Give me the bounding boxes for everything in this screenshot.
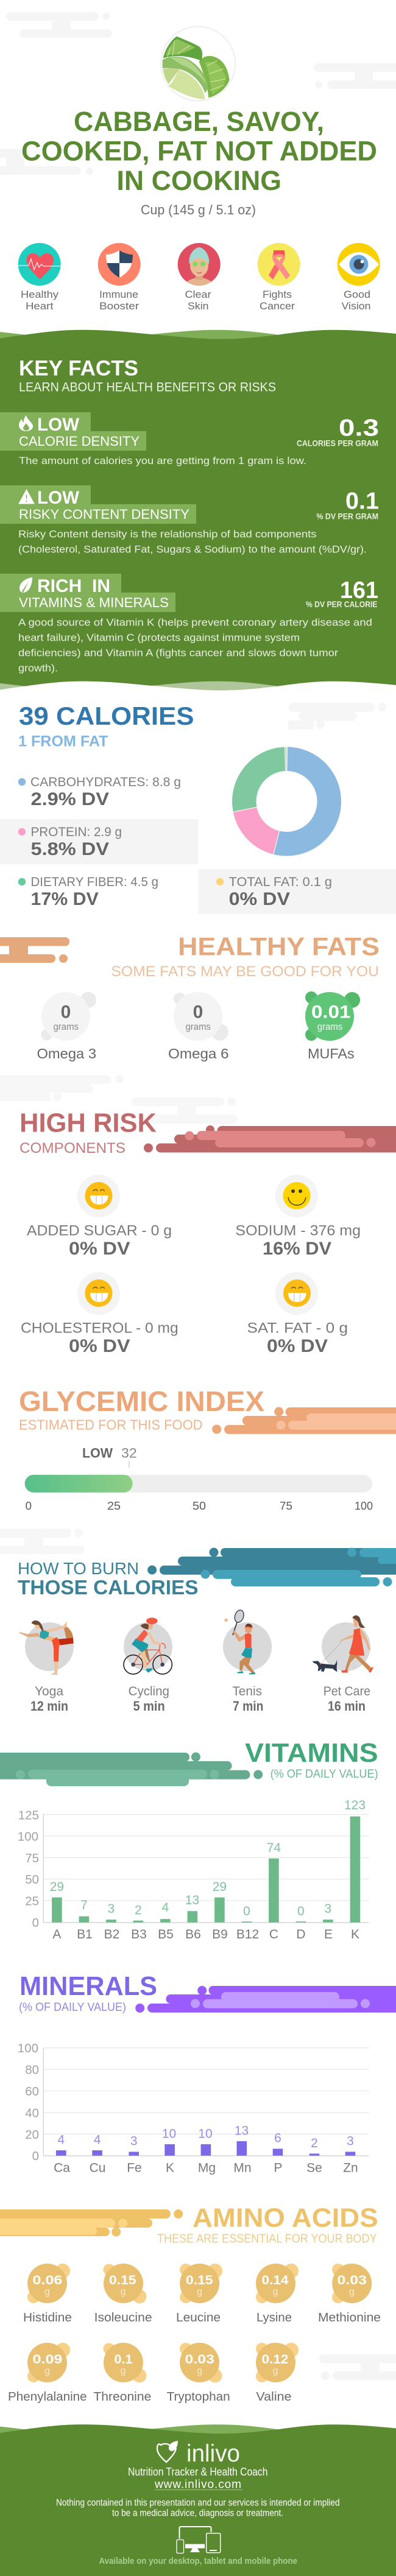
logo: inlivo: inlivo (186, 2440, 240, 2467)
icon: devices (177, 2527, 221, 2553)
bar chart: vitamins: K (351, 1927, 359, 1941)
risk: sodium (235, 1175, 361, 1259)
gauge scale: 75 (280, 1499, 292, 1512)
fact: risky content density: % DV PER GRAM (317, 512, 378, 521)
fact: rich in vitamins and minerals: 161 (340, 577, 378, 604)
amino: valine: Valine (256, 2390, 291, 2404)
heading (19, 1108, 157, 1156)
bar chart: minerals (18, 2041, 369, 2175)
fact: risky content density: (Cholesterol, Saturated Fat, Sugars & Sodium) to the amount (%DV/gr). (18, 543, 367, 555)
heading (19, 357, 276, 395)
gauge value: LOW (82, 1446, 113, 1461)
banner stripes (135, 1986, 396, 2013)
banner stripes (144, 1125, 396, 1152)
fact: calorie density: CALORIE DENSITY (19, 434, 140, 449)
amino: methionine (318, 2264, 381, 2324)
icon: flame (19, 415, 33, 431)
panel: calories (0, 702, 396, 914)
heading: HIGH RISK (19, 1108, 157, 1138)
heading: (% OF DAILY VALUE) (270, 1768, 378, 1781)
heading: 1 FROM FAT (18, 733, 108, 750)
legend: protein: PROTEIN: 2.9 g (30, 825, 122, 839)
panel: healthy fats (0, 932, 380, 1061)
banner stripes (0, 937, 69, 963)
fact: risky content density: 0.1 (345, 488, 379, 515)
figure: cyclist (124, 1617, 172, 1674)
gauge scale: 0 (26, 1499, 32, 1512)
legend: carbohydrates: 2.9% DV (30, 789, 109, 809)
bar chart: vitamins: 3 (108, 1902, 115, 1916)
disclaimer (56, 2498, 340, 2519)
icon labels: Skin (188, 301, 208, 312)
icon labels: Cancer (260, 301, 295, 312)
legend: carbohydrates (18, 775, 181, 809)
bar chart: vitamins: 29 (213, 1880, 227, 1894)
figure: tennis player (224, 1609, 255, 1674)
heading: KEY FACTS (19, 357, 138, 380)
risk: saturated fat: SAT. FAT - 0 g (247, 1320, 348, 1337)
fact: calorie density (0, 412, 379, 466)
title: CABBAGE, SAVOY, (74, 106, 324, 137)
bar chart: vitamins: 0 (297, 1904, 305, 1918)
heading (18, 1559, 199, 1599)
amino: lysine: Lysine (256, 2311, 292, 2324)
bar chart: minerals: 10 (198, 2127, 213, 2141)
activity: cycling: Cycling (129, 1684, 169, 1698)
bar chart: vitamins: 0 (243, 1904, 250, 1918)
icon: warning (19, 490, 34, 504)
omega 3: grams (54, 1022, 79, 1032)
activity: tennis (223, 1609, 272, 1714)
food photo: cabbage (161, 27, 235, 101)
bar chart: minerals: Zn (343, 2161, 358, 2175)
bar chart: vitamins: 75 (25, 1851, 39, 1865)
bar chart: vitamins: B1 (77, 1927, 93, 1941)
gauge scale (26, 1499, 373, 1512)
legend: dietary fiber (18, 875, 158, 909)
bar chart: vitamins (18, 1798, 369, 1941)
omega 3: Omega 3 (37, 1046, 96, 1061)
panel: glycemic index (19, 1385, 396, 1512)
amino: tryptophan (167, 2343, 230, 2404)
bar chart: minerals: 4 (94, 2133, 101, 2147)
legend: dietary fiber: DIETARY FIBER: 4.5 g (30, 875, 158, 889)
legend: protein: 5.8% DV (30, 839, 109, 859)
bar chart: vitamins: 25 (25, 1894, 39, 1909)
heading: THESE ARE ESSENTIAL FOR YOUR BODY (157, 2233, 377, 2246)
icon: good vision eye (338, 243, 380, 286)
bar chart: minerals: 20 (25, 2128, 39, 2142)
icon labels (21, 289, 370, 312)
panel: amino acids (0, 2203, 381, 2404)
icon labels: Healthy (21, 289, 59, 300)
amino: histidine: Histidine (23, 2311, 72, 2324)
tagline: Nutrition Tracker & Health Coach (128, 2466, 268, 2478)
amino: methionine: Methionine (318, 2311, 381, 2324)
icon: immune booster shield (98, 243, 141, 286)
bar chart: minerals: 2 (311, 2136, 318, 2150)
amino: lysine: g (273, 2287, 278, 2297)
fact: rich in vitamins and minerals: A good source of Vitamin K (helps prevent coronary artery disease and (18, 616, 372, 628)
activity: pet care: Pet Care (324, 1684, 370, 1698)
amino: isoleucine (94, 2264, 152, 2324)
amino: tryptophan: Tryptophan (167, 2390, 230, 2404)
heading: COMPONENTS (19, 1140, 126, 1156)
banner stripes (147, 1548, 396, 1586)
legend: total fat: TOTAL FAT: 0.1 g (229, 875, 332, 889)
bar chart: minerals: K (166, 2161, 174, 2175)
heading: SOME FATS MAY BE GOOD FOR YOU (111, 963, 379, 980)
serving size: Cup (145 g / 5.1 oz) (141, 202, 256, 217)
title: IN COOKING (117, 165, 281, 196)
fact: calorie density: CALORIES PER GRAM (297, 438, 378, 448)
amino: leucine (176, 2264, 222, 2324)
amino: histidine: 0.06 (33, 2272, 62, 2287)
icon labels: Immune (99, 289, 138, 300)
icon labels: Good (344, 289, 370, 300)
bar chart: minerals: Ca (54, 2161, 70, 2175)
activity: cycling (124, 1617, 172, 1714)
title: COOKED, FAT NOT ADDED (21, 135, 377, 167)
amino: histidine: g (44, 2287, 50, 2297)
availability note: Available on your desktop, tablet and mobile phone (99, 2556, 297, 2566)
bar chart: minerals: 13 (235, 2124, 249, 2138)
heading (19, 1385, 264, 1433)
risk: sodium: 16% DV (263, 1239, 331, 1259)
omega 3 (37, 992, 96, 1061)
icon labels: Booster (99, 301, 140, 312)
mufas (305, 991, 360, 1061)
legend: protein (0, 819, 199, 864)
bar chart: minerals: 4 (57, 2133, 65, 2147)
heading (157, 2203, 378, 2246)
mufas: MUFAs (308, 1046, 355, 1061)
disclaimer: to be a medical advice, diagnosis or treatment. (112, 2508, 283, 2519)
gauge bar (25, 1475, 372, 1493)
amino: histidine (23, 2264, 72, 2324)
amino: phenylalanine: Phenylalanine (8, 2390, 87, 2404)
gauge scale: 50 (193, 1499, 206, 1512)
legend: dietary fiber: 17% DV (30, 889, 99, 909)
omega 6: 0 (193, 1002, 203, 1022)
fact: rich in vitamins and minerals: % DV PER CALORIE (306, 599, 378, 609)
bar chart: minerals: P (274, 2161, 283, 2175)
amino: methionine: 0.03 (338, 2272, 367, 2287)
activity: tennis: Tenis (232, 1684, 262, 1698)
bar chart: vitamins: 123 (344, 1798, 366, 1812)
mufas: 0.01 (311, 1002, 351, 1022)
activity: pet care (313, 1616, 373, 1714)
amino: isoleucine: 0.15 (109, 2272, 136, 2287)
gauge scale: 100 (355, 1499, 373, 1512)
heading (245, 1738, 378, 1781)
bar chart: minerals: 60 (25, 2085, 39, 2099)
bar chart: vitamins: 3 (325, 1902, 331, 1916)
bar chart: minerals: Mg (198, 2161, 216, 2175)
icon labels: Fights (263, 289, 292, 300)
amino: phenylalanine: 0.09 (33, 2351, 62, 2367)
donut chart (232, 747, 342, 856)
activity: yoga: 12 min (30, 1698, 68, 1714)
risk: saturated fat (247, 1272, 348, 1356)
activity: yoga (19, 1621, 74, 1714)
icon: grinning face (85, 1279, 112, 1307)
banner stripes (0, 2209, 183, 2236)
panel: key facts (0, 330, 396, 697)
risk: cholesterol: CHOLESTEROL - 0 mg (21, 1320, 179, 1337)
gauge value (82, 1446, 137, 1468)
bar chart: vitamins: 74 (267, 1841, 281, 1855)
amino: threonine: g (121, 2366, 126, 2376)
amino: valine (256, 2343, 299, 2404)
bar chart: vitamins: 0 (32, 1916, 39, 1930)
fact: calorie density: 0.3 (339, 415, 379, 442)
bar chart: minerals: 3 (347, 2134, 354, 2148)
banner stripes (212, 1407, 396, 1434)
amino: threonine (93, 2343, 151, 2404)
bar chart: vitamins: 2 (135, 1903, 142, 1917)
activity: tennis: 7 min (233, 1698, 263, 1714)
panel: vitamins (0, 1738, 378, 1941)
fact: rich in vitamins and minerals: RICH IN (37, 576, 110, 596)
heading: MINERALS (19, 1971, 157, 2001)
risk: sodium: SODIUM - 376 mg (235, 1223, 361, 1239)
bar chart: vitamins: D (296, 1927, 305, 1941)
footer (0, 2424, 396, 2576)
bar chart: vitamins: 4 (162, 1901, 169, 1915)
green wave background (0, 2424, 396, 2576)
heading: GLYCEMIC INDEX (19, 1385, 264, 1417)
bar chart: vitamins: A (52, 1927, 61, 1941)
icon labels: Clear (185, 289, 211, 300)
amino: lysine (256, 2264, 299, 2324)
legend: carbohydrates: CARBOHYDRATES: 8.8 g (30, 775, 181, 789)
amino: methionine: g (349, 2287, 355, 2297)
logo: inlivo (157, 2440, 240, 2467)
bar chart: minerals: 40 (25, 2106, 39, 2120)
heading (111, 932, 380, 980)
title (21, 106, 377, 196)
activity: pet care: 16 min (328, 1698, 366, 1714)
panel: high risk components (19, 1108, 396, 1356)
panel: minerals (18, 1971, 396, 2175)
bar chart: vitamins: B9 (212, 1927, 228, 1941)
gauge scale: 25 (107, 1499, 121, 1512)
heading: ESTIMATED FOR THIS FOOD (19, 1417, 202, 1433)
heading: (% OF DAILY VALUE) (19, 2001, 126, 2014)
icon: smiling face (283, 1182, 311, 1209)
panel: how to burn those calories (18, 1548, 396, 1714)
omega 6 (168, 992, 229, 1061)
heading (19, 1971, 157, 2014)
fact: calorie density: The amount of calories you are getting from 1 gram is low. (19, 455, 306, 466)
amino: threonine: Threonine (93, 2390, 151, 2404)
banner stripes (0, 1753, 263, 1786)
icon: cancer ribbon (258, 243, 300, 286)
amino: leucine: Leucine (176, 2311, 221, 2324)
omega 3: 0 (61, 1002, 71, 1022)
amino: threonine: 0.1 (115, 2351, 133, 2367)
amino: isoleucine: Isoleucine (94, 2311, 152, 2324)
disclaimer: Nothing contained in this presentation and our services is intended or implied (56, 2498, 340, 2508)
bar chart: minerals: 80 (25, 2063, 39, 2077)
figure: yoga pose (19, 1621, 74, 1675)
bar chart: vitamins: B2 (104, 1927, 119, 1941)
heading: THOSE CALORIES (18, 1576, 199, 1599)
risk: added sugar (27, 1175, 172, 1259)
amino: tryptophan: g (197, 2366, 202, 2376)
fact: calorie density: LOW (37, 415, 80, 435)
amino: valine: g (273, 2366, 278, 2376)
fact: rich in vitamins and minerals: VITAMINS & MINERALS (19, 595, 169, 610)
bar chart: minerals: 3 (130, 2134, 138, 2148)
green wave background (0, 330, 396, 697)
icon: healthy heart (18, 243, 61, 286)
risk: cholesterol (21, 1272, 179, 1356)
heading: HEALTHY FATS (178, 932, 380, 961)
bar chart: minerals: Fe (127, 2161, 142, 2175)
amino: isoleucine: g (121, 2287, 126, 2297)
bar chart: vitamins: 13 (185, 1893, 199, 1907)
legend: total fat: 0% DV (229, 889, 290, 909)
risk: saturated fat: 0% DV (267, 1336, 328, 1356)
heading: 39 CALORIES (19, 702, 194, 730)
bar chart: minerals: 0 (32, 2149, 39, 2163)
mufas: grams (317, 1022, 342, 1032)
bar chart: minerals: 10 (162, 2127, 176, 2141)
fact: risky content density: LOW (37, 488, 80, 508)
bar chart: minerals: 6 (274, 2131, 281, 2145)
bar chart: vitamins: 29 (50, 1880, 64, 1894)
amino: tryptophan: 0.03 (185, 2351, 214, 2367)
fact: rich in vitamins and minerals: heart failure), Vitamin C (protects against immune system (18, 632, 300, 643)
omega 6: Omega 6 (168, 1046, 229, 1061)
risk: added sugar: ADDED SUGAR - 0 g (27, 1223, 172, 1239)
bar chart: vitamins: B6 (185, 1927, 201, 1941)
fact: risky content density: RISKY CONTENT DENSITY (19, 507, 189, 522)
bar chart: minerals: Cu (90, 2161, 105, 2175)
heading: HOW TO BURN (18, 1559, 139, 1578)
fact: risky content density: Risky Content density is the relationship of bad components (18, 529, 317, 540)
benefits row (18, 243, 380, 312)
bar chart: vitamins: 100 (18, 1829, 38, 1844)
icon: clear skin face (178, 243, 221, 286)
amino: phenylalanine: g (44, 2366, 50, 2376)
bar chart: vitamins: 50 (25, 1873, 39, 1887)
amino: leucine: g (197, 2287, 202, 2297)
bar chart: minerals: Se (306, 2161, 322, 2175)
heading: AMINO ACIDS (193, 2203, 378, 2233)
figure: woman walking dog (313, 1616, 373, 1673)
fact: risky content density (0, 485, 379, 555)
bar chart: vitamins: E (324, 1927, 333, 1941)
icon: grinning face (85, 1182, 112, 1209)
omega 6: grams (185, 1022, 211, 1032)
heading (18, 702, 194, 750)
bar chart: minerals: 100 (18, 2041, 38, 2055)
amino: leucine: 0.15 (186, 2272, 213, 2287)
icon: leaf (19, 577, 32, 593)
heading: LEARN ABOUT HEALTH BENEFITS OR RISKS (19, 380, 276, 395)
website link: www.inlivo.com (154, 2479, 241, 2491)
fact: rich in vitamins and minerals: growth). (18, 663, 58, 674)
bar chart: vitamins: B12 (236, 1927, 259, 1941)
bar chart: vitamins: B3 (131, 1927, 147, 1941)
bar chart: minerals: Mn (233, 2161, 252, 2175)
heading: VITAMINS (245, 1738, 378, 1768)
amino: phenylalanine (8, 2343, 87, 2404)
bar chart: vitamins: 7 (80, 1898, 88, 1912)
amino: lysine: 0.14 (262, 2272, 289, 2287)
fact: rich in vitamins and minerals: deficiencies) and Vitamin A (fights cancer and slows down tumor (18, 647, 338, 659)
icon: grinning face (283, 1279, 311, 1307)
fact: rich in vitamins and minerals (0, 574, 378, 674)
activity: yoga: Yoga (35, 1684, 63, 1698)
bar chart: vitamins: B5 (158, 1927, 174, 1941)
icon labels: Vision (341, 301, 370, 312)
icon labels: Heart (26, 301, 54, 312)
legend: total fat (199, 869, 396, 914)
amino: valine: 0.12 (262, 2351, 289, 2367)
bar chart: vitamins: C (269, 1927, 278, 1941)
bar chart: vitamins: 125 (18, 1808, 39, 1822)
gauge value: 32 (121, 1446, 137, 1461)
risk: cholesterol: 0% DV (69, 1336, 130, 1356)
risk: added sugar: 0% DV (69, 1239, 130, 1259)
activity: cycling: 5 min (133, 1698, 165, 1714)
